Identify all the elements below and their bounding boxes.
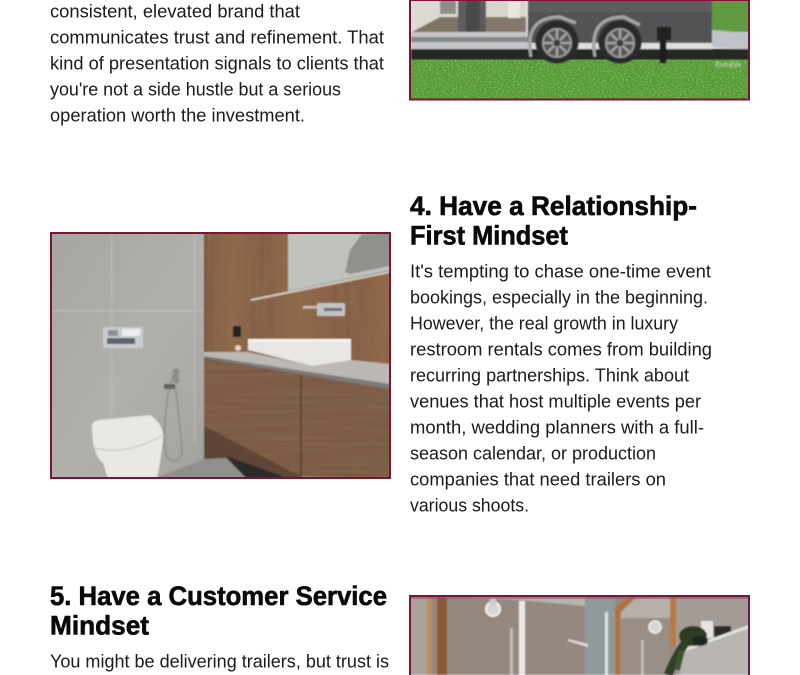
countertop bbox=[204, 352, 390, 389]
hose bbox=[164, 375, 182, 461]
image: glass shower with mirror and plant bbox=[410, 596, 749, 675]
underside recess bbox=[204, 424, 300, 479]
text block: brand paragraph ending bbox=[50, 2, 384, 126]
sink bbox=[248, 339, 351, 366]
heading: 5. Have a Customer Service Mindset: Mindset bbox=[50, 610, 149, 640]
flush plate bbox=[103, 327, 143, 348]
text block: brand paragraph ending: consistent, elevated brand that bbox=[50, 2, 300, 22]
jack bbox=[660, 28, 666, 63]
heading: 5. Have a Customer Service Mindset: 5. Have a Customer Service bbox=[50, 581, 387, 611]
image: restroom trailer on grass bbox=[410, 0, 750, 100]
right wall bbox=[676, 596, 749, 675]
floor bbox=[158, 457, 246, 477]
shower head left bbox=[486, 602, 500, 616]
heading: 4. Have a Relationship-First Mindset: First Mindset bbox=[410, 220, 568, 250]
text block: relationship-first paragraph: bookings, especially in the beginning. bbox=[410, 288, 708, 308]
watermark: Portable bbox=[715, 60, 742, 69]
text block: relationship-first paragraph: companies that need trailers on bbox=[410, 470, 666, 490]
text block: relationship-first paragraph: various shoots. bbox=[410, 496, 529, 516]
wood mirror frame bbox=[615, 608, 620, 675]
text block: brand paragraph ending: you're not a side hustle but a serious bbox=[50, 80, 341, 100]
grass bbox=[411, 60, 749, 99]
plant bbox=[679, 626, 707, 646]
image: bathroom with wood vanity bbox=[51, 233, 391, 480]
text block: brand paragraph ending: communicates trust and refinement. That bbox=[50, 28, 384, 48]
faucet bbox=[317, 303, 345, 316]
text block: relationship-first paragraph: It's tempting to chase one-time event bbox=[410, 262, 711, 282]
text block: relationship-first paragraph: season calendar, or production bbox=[410, 444, 656, 464]
text block: relationship-first paragraph: month, wedding planners with a full- bbox=[410, 418, 704, 438]
text block: relationship-first paragraph: restroom rentals comes from building bbox=[410, 340, 712, 360]
text block: relationship-first paragraph bbox=[410, 262, 712, 516]
cabinet bbox=[204, 358, 390, 479]
text block: brand paragraph ending: operation worth the investment. bbox=[50, 106, 305, 126]
heading: 5. Have a Customer Service Mindset bbox=[50, 581, 387, 640]
text block: relationship-first paragraph: recurring partnerships. Think about bbox=[410, 366, 689, 386]
heading: 4. Have a Relationship-First Mindset bbox=[410, 191, 697, 250]
backsplash bbox=[287, 273, 389, 364]
text block: relationship-first paragraph: venues that host multiple events per bbox=[410, 392, 701, 412]
text block: customer service paragraph start: You might be delivering trailers, but trust is bbox=[50, 652, 389, 672]
heading: 4. Have a Relationship-First Mindset: 4. Have a Relationship- bbox=[410, 191, 697, 221]
text block: brand paragraph ending: kind of presentation signals to clients that bbox=[50, 54, 384, 74]
mirror bbox=[288, 233, 390, 291]
text block: relationship-first paragraph: However, the real growth in luxury bbox=[410, 314, 678, 334]
wheels bbox=[536, 20, 578, 64]
toilet bbox=[92, 415, 163, 479]
